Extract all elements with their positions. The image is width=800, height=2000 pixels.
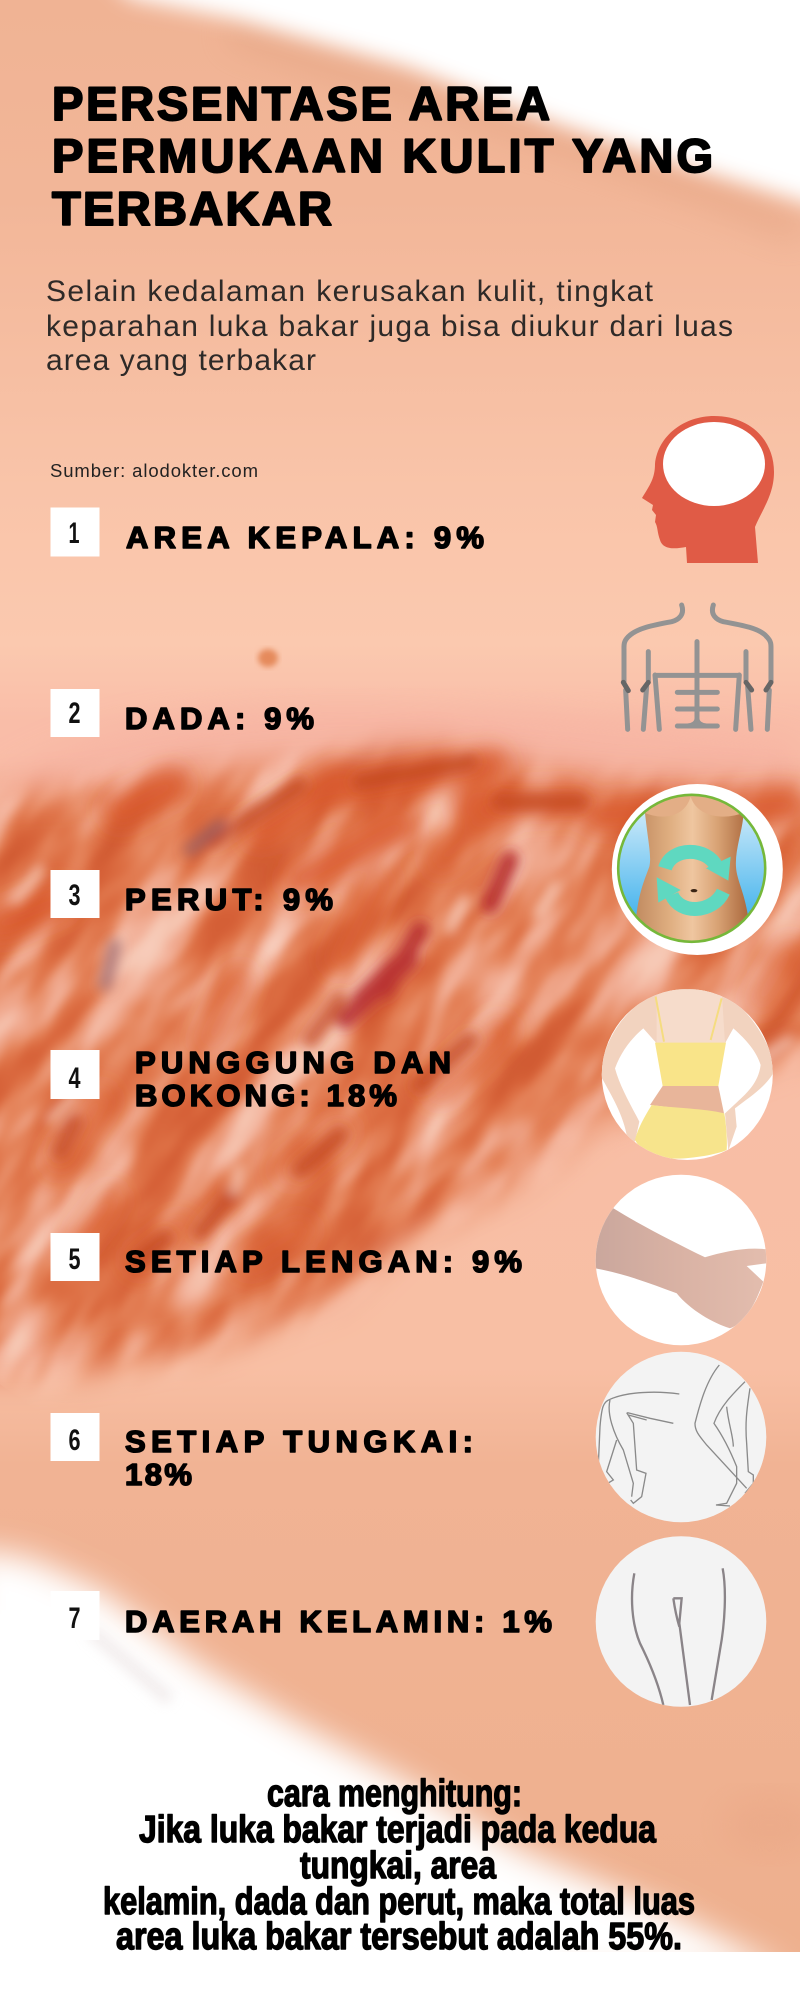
calculation note: tungkai, area	[300, 1845, 497, 1887]
item 5: arm: 5	[68, 1243, 80, 1276]
item 3: abdomen: PERUT: 9%	[125, 882, 333, 917]
calculation note: Jika luka bakar terjadi pada kedua	[139, 1809, 657, 1851]
item 4: back and buttocks: PUNGGUNG DAN	[135, 1045, 451, 1080]
calculation note	[103, 1773, 695, 1958]
item 1: head: 1	[68, 517, 80, 550]
item 7: genital area: 7	[68, 1602, 80, 1635]
item 4: back and buttocks: 4	[68, 1062, 81, 1095]
item 5: arm: SETIAP LENGAN: 9%	[125, 1244, 522, 1279]
icon: arm photo circle	[590, 1175, 767, 1345]
calculation note: cara menghitung:	[267, 1773, 522, 1815]
title: TERBAKAR	[52, 182, 332, 235]
item 1: head	[50, 508, 484, 556]
item 6: legs: 18%	[125, 1457, 192, 1492]
item 4: back and buttocks: BOKONG: 18%	[135, 1078, 397, 1113]
item 7: genital area	[50, 1591, 552, 1640]
item 3: abdomen	[50, 870, 333, 918]
title	[52, 77, 713, 235]
item 6: legs	[50, 1413, 473, 1492]
item 2: chest	[50, 689, 314, 737]
icon: back photo circle	[599, 983, 775, 1160]
title: PERMUKAAN KULIT YANG	[52, 129, 713, 182]
item 4: back and buttocks	[50, 1045, 451, 1113]
intro text: area yang terbakar	[46, 344, 316, 377]
calculation note: area luka bakar tersebut adalah 55%.	[116, 1916, 682, 1958]
icon: abdomen circle	[612, 784, 783, 955]
intro text: keparahan luka bakar juga bisa diukur dari luas	[46, 310, 733, 343]
icon: groin sketch circle	[596, 1536, 766, 1707]
icon: legs sketch circle	[596, 1352, 766, 1522]
item 6: legs: 6	[68, 1424, 80, 1457]
item 2: chest: DADA: 9%	[125, 701, 314, 736]
intro text: Selain kedalaman kerusakan kulit, tingkat	[46, 275, 654, 308]
item 1: head: AREA KEPALA: 9%	[126, 520, 484, 555]
item 6: legs: SETIAP TUNGKAI:	[125, 1424, 473, 1459]
title: PERSENTASE AREA	[52, 77, 550, 130]
icon: chest outline	[623, 605, 771, 729]
intro text	[46, 275, 733, 377]
item 3: abdomen: 3	[68, 879, 80, 912]
icon: head silhouette	[642, 416, 774, 563]
source note: Sumber: alodokter.com	[50, 460, 258, 481]
item 7: genital area: DAERAH KELAMIN: 1%	[125, 1604, 552, 1639]
item 5: arm	[50, 1233, 522, 1281]
item 2: chest: 2	[68, 697, 80, 730]
